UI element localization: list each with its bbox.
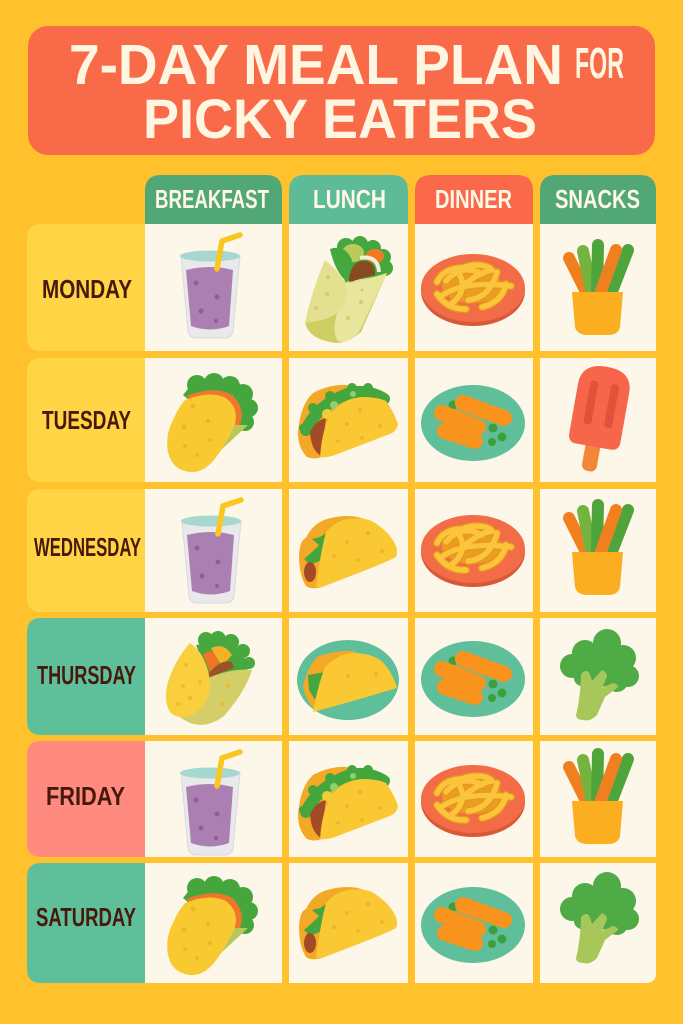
column header: Dinner xyxy=(415,175,533,224)
row label: Friday xyxy=(27,741,145,857)
Friday snack: veggie sticks xyxy=(569,754,628,844)
row label: Monday: MONDAY xyxy=(42,274,132,304)
Friday dinner: noodles xyxy=(421,765,525,837)
column header: Snacks: SNACKS xyxy=(555,184,640,214)
Tuesday dinner: fish sticks xyxy=(421,385,525,461)
Friday lunch: taco xyxy=(298,765,398,840)
meal grid cells xyxy=(145,224,656,983)
row label: Tuesday: TUESDAY xyxy=(42,405,131,435)
column header: Breakfast xyxy=(145,175,282,224)
Tuesday lunch: taco xyxy=(298,383,398,458)
Tuesday snack: popsicle xyxy=(563,362,633,476)
Wednesday dinner: noodles xyxy=(421,515,525,587)
Saturday breakfast: taco wrap xyxy=(167,876,258,975)
row label: Saturday xyxy=(27,863,145,983)
column header: Lunch xyxy=(289,175,408,224)
title line one: 7-DAY MEAL PLAN xyxy=(69,33,563,97)
column header: Lunch: LUNCH xyxy=(313,184,386,214)
row label: Friday: FRIDAY xyxy=(46,781,125,811)
Saturday snack: broccoli xyxy=(560,872,639,963)
title line two: PICKY EATERS xyxy=(143,87,537,150)
row label: Tuesday xyxy=(27,358,145,482)
column header: Snacks xyxy=(540,175,656,224)
Friday breakfast: smoothie xyxy=(180,752,240,855)
title word FOR: FOR xyxy=(575,39,624,88)
Thursday lunch: taco on a plate xyxy=(297,640,399,720)
column header: Breakfast: BREAKFAST xyxy=(155,184,269,214)
Wednesday breakfast: smoothie xyxy=(181,500,241,603)
Monday breakfast: smoothie xyxy=(180,235,240,338)
Thursday dinner: fish sticks xyxy=(421,641,525,717)
Wednesday snack: veggie sticks xyxy=(569,505,628,595)
Tuesday breakfast: taco wrap xyxy=(167,373,258,472)
row label: Wednesday xyxy=(27,489,145,612)
column header: Dinner: DINNER xyxy=(435,184,512,214)
row label: Monday xyxy=(27,224,145,351)
Saturday lunch: taco xyxy=(299,887,397,959)
row label: Wednesday: WEDNESDAY xyxy=(34,532,141,562)
Saturday dinner: fish sticks xyxy=(421,887,525,963)
row label: Saturday: SATURDAY xyxy=(36,902,136,932)
title banner xyxy=(28,26,655,155)
Thursday snack: broccoli xyxy=(560,629,639,720)
row label: Thursday: THURSDAY xyxy=(37,660,136,690)
Thursday breakfast: burrito xyxy=(166,631,255,725)
row label: Thursday xyxy=(27,618,145,735)
Monday dinner: noodles xyxy=(421,254,525,326)
Monday lunch: burrito xyxy=(305,236,393,343)
Wednesday lunch: taco xyxy=(299,516,397,588)
Monday snack: veggie sticks xyxy=(569,245,628,335)
